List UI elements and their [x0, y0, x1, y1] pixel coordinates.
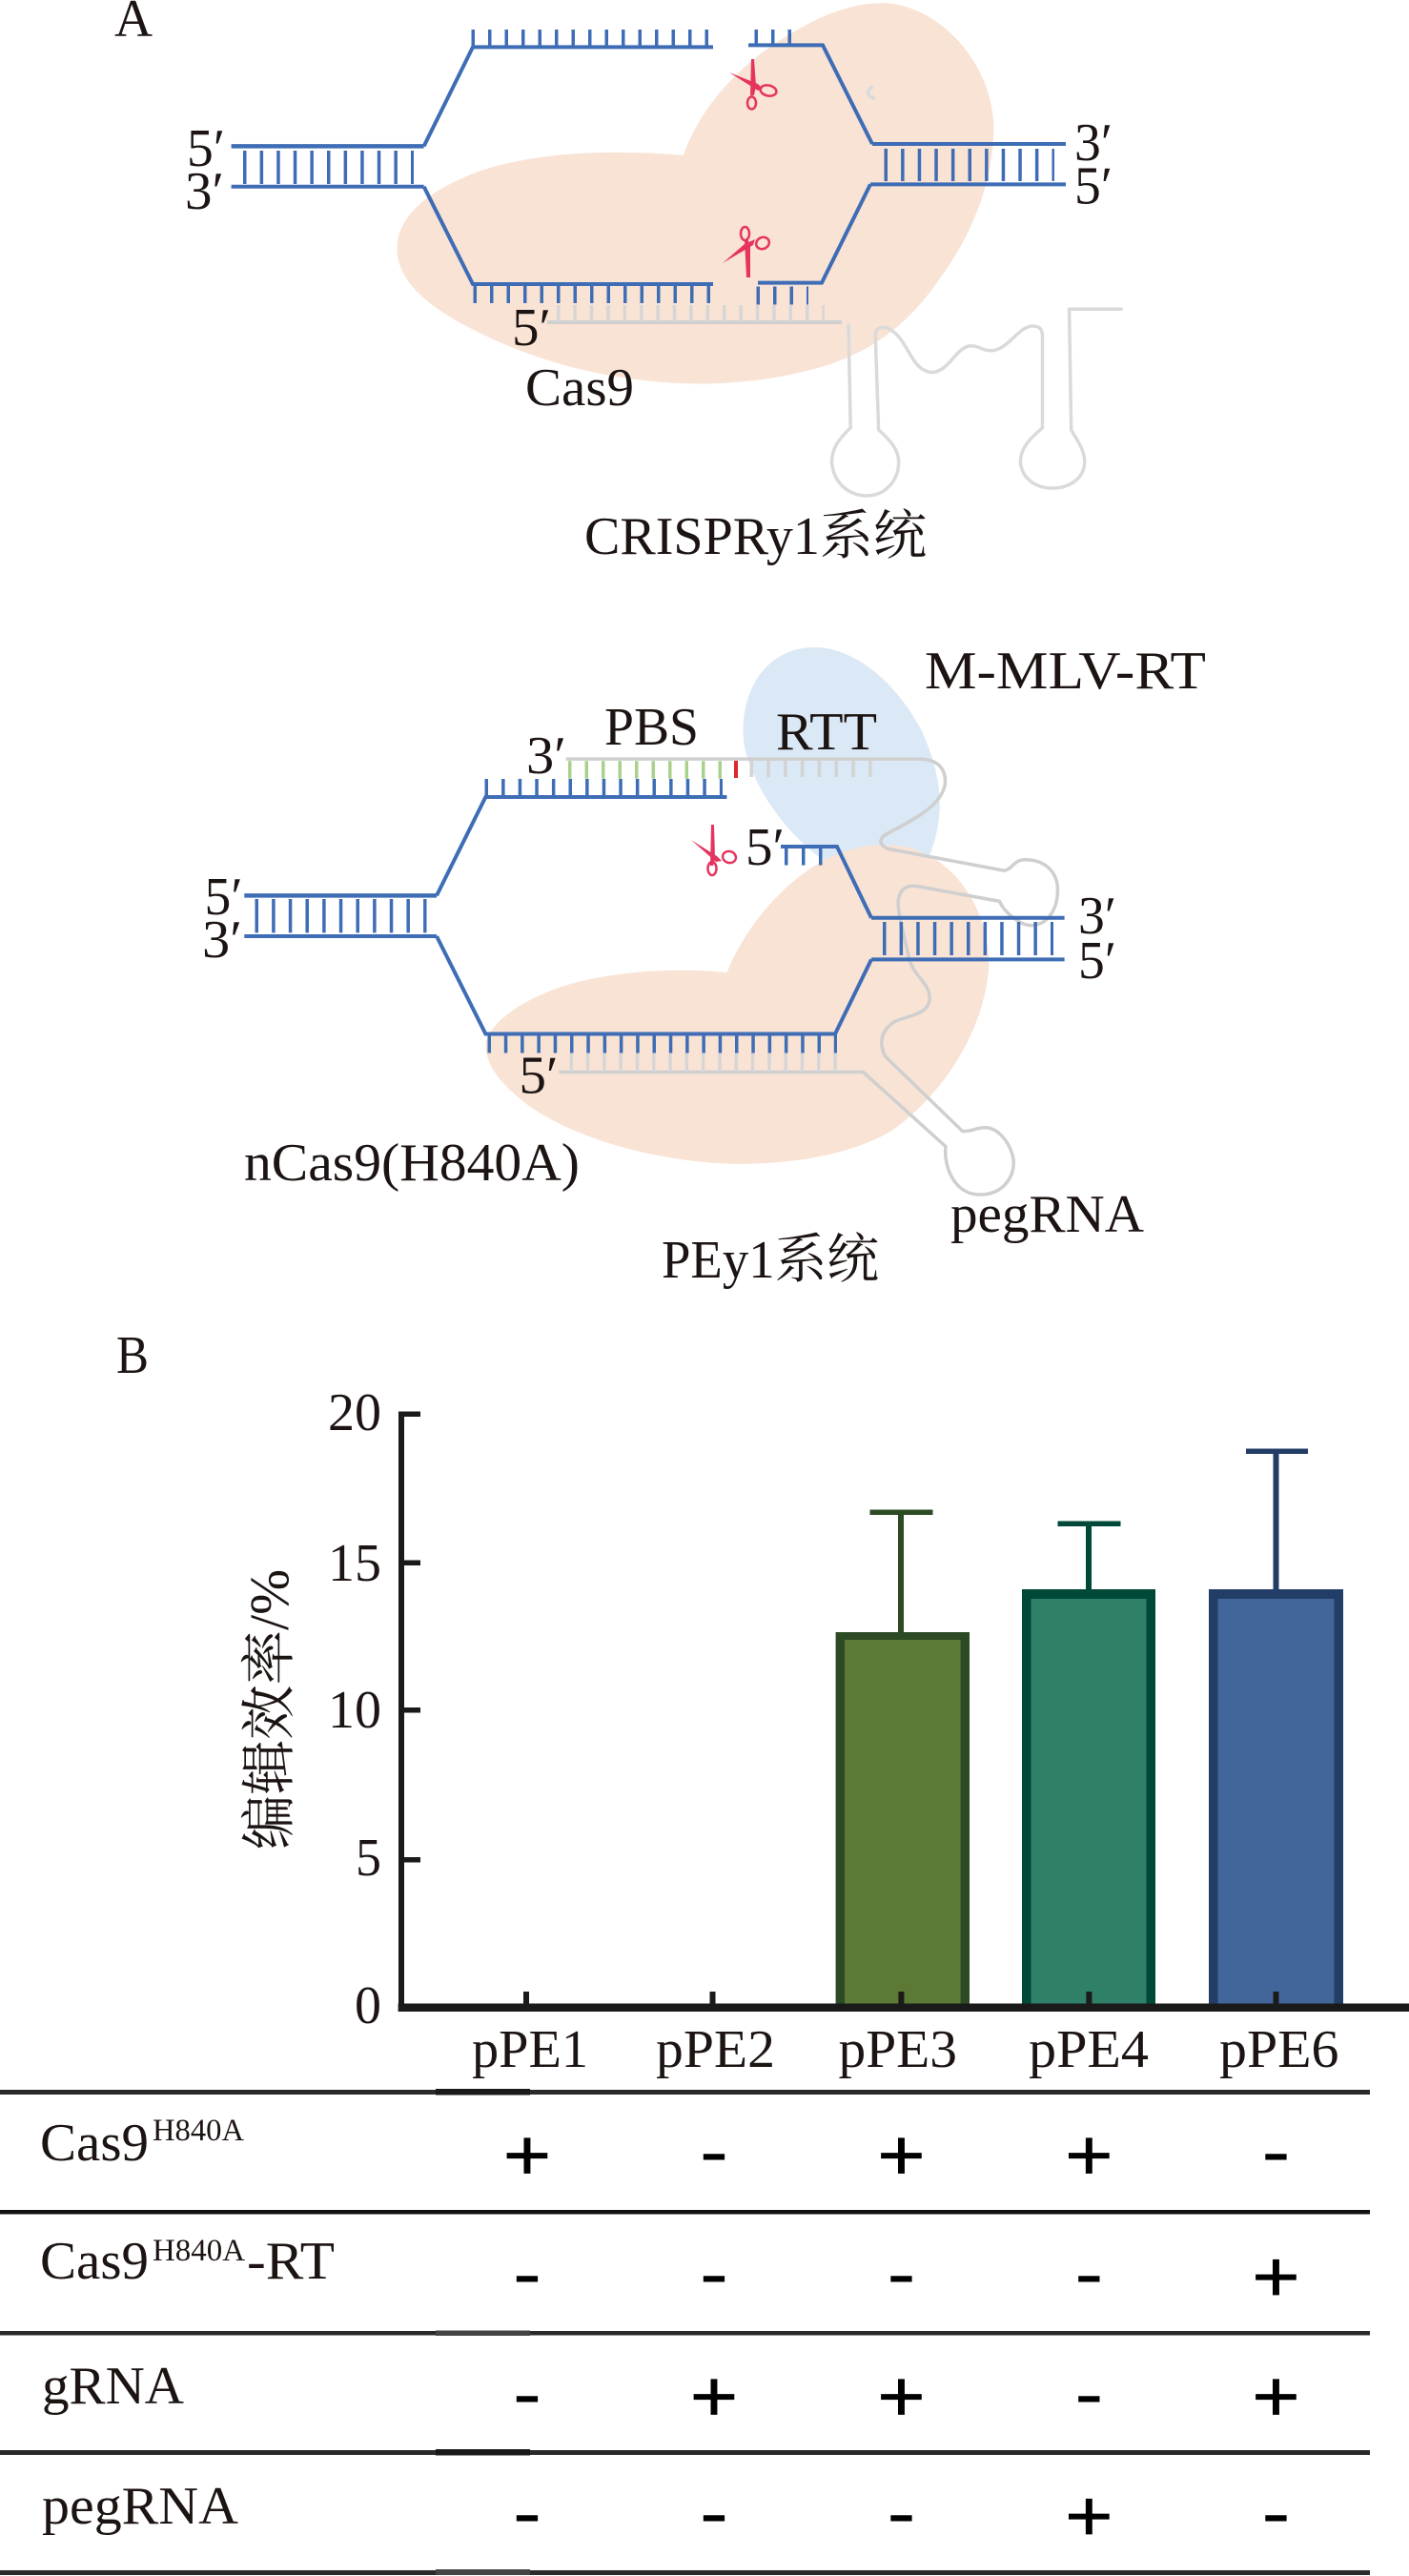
- row: Cas9 H840A: +: [503, 2116, 551, 2196]
- bar: pPE4: [1022, 1522, 1155, 2004]
- RTT grey bases: [749, 761, 872, 777]
- PE system caption: PEy1系统: [662, 1231, 879, 1290]
- row: gRNA: +: [877, 2357, 926, 2437]
- pegRNA label: pegRNA: [950, 1185, 1145, 1244]
- y tick labels: 5: [356, 1829, 381, 1888]
- panel label B: B: [116, 1326, 149, 1385]
- row: pegRNA: +: [1065, 2476, 1113, 2556]
- x axis labels: pPE3: [839, 2020, 957, 2079]
- row: Cas9 H840A-RT: -: [1075, 2248, 1103, 2303]
- 3 prime label: 3′: [526, 726, 566, 786]
- end labels: left: 5′: [204, 868, 242, 927]
- row: Cas9 H840A: -: [1262, 2126, 1290, 2181]
- end labels: right: 3′: [1074, 113, 1113, 173]
- row: Cas9 H840A-RT: -RT: [247, 2232, 335, 2291]
- M-MLV-RT label: M-MLV-RT: [925, 642, 1206, 701]
- pegRNA spacer teeth: [570, 1053, 837, 1072]
- x axis labels: pPE2: [656, 2020, 775, 2079]
- table rules: [0, 2089, 1370, 2575]
- guide 5 prime label: 5′: [512, 298, 551, 358]
- row: Cas9 H840A: [40, 2114, 1290, 2196]
- row: gRNA: +: [1252, 2357, 1300, 2437]
- DNA double strand: left: [244, 895, 437, 936]
- y axis title: 编辑效率/%: [238, 1569, 300, 1850]
- guide RNA scaffold: [832, 87, 1123, 496]
- DNA top strand: [437, 787, 726, 895]
- nCas9 protein blob: [485, 845, 989, 1164]
- DNA double strand: right: [870, 144, 1066, 184]
- DNA top strand with nick: [424, 37, 872, 146]
- Cas9 label: Cas9: [525, 358, 634, 418]
- 5 prime flap label: 5′: [745, 818, 785, 877]
- x axis labels: [472, 2020, 1338, 2079]
- table: construct components: [0, 2089, 1370, 2575]
- end labels: right: 5′: [1074, 156, 1113, 215]
- bar: pPE6: [1209, 1449, 1343, 2004]
- end labels: left: [185, 119, 225, 221]
- row: pegRNA: -: [700, 2487, 728, 2543]
- icon: scissors: [691, 825, 737, 875]
- y tick labels: 20: [328, 1383, 381, 1442]
- row: gRNA: -: [1075, 2368, 1103, 2423]
- end labels: left: [202, 868, 242, 970]
- guide RNA spacer strand: [547, 314, 842, 322]
- row: Cas9 H840A: Cas9: [40, 2114, 149, 2173]
- row: Cas9 H840A: +: [1065, 2116, 1113, 2196]
- nicked 5 prime flap: [781, 847, 871, 918]
- end labels: right: [1078, 887, 1116, 991]
- row: gRNA: +: [690, 2357, 738, 2437]
- row: pegRNA: -: [888, 2487, 915, 2543]
- row: Cas9 H840A-RT: -: [700, 2248, 728, 2303]
- Cas9 protein blob: [398, 3, 993, 384]
- CRISPR system caption: CRISPRy1系统: [584, 507, 927, 566]
- row: Cas9 H840A-RT: H840A: [153, 2234, 245, 2268]
- end labels: left: 5′: [187, 119, 225, 178]
- row: Cas9 H840A-RT: [40, 2232, 1300, 2317]
- RTT label: RTT: [776, 703, 877, 762]
- row: Cas9 H840A-RT: -: [513, 2248, 541, 2303]
- end labels: right: 3′: [1078, 887, 1116, 946]
- end labels: left: 3′: [202, 910, 242, 970]
- pegRNA strand: [559, 759, 1057, 1195]
- y tick labels: 0: [355, 1976, 381, 2035]
- x axis labels: pPE6: [1219, 2020, 1338, 2079]
- row: Cas9 H840A-RT: +: [1252, 2237, 1300, 2317]
- row: Cas9 H840A-RT: Cas9: [40, 2232, 149, 2291]
- x axis labels: pPE1: [472, 2020, 588, 2079]
- bar chart: editing efficiency: [238, 1383, 1409, 2079]
- end labels: left: 3′: [185, 162, 224, 221]
- row: Cas9 H840A: -: [700, 2126, 728, 2181]
- PBS label: PBS: [604, 698, 699, 757]
- panel: prime editor system diagram: [202, 642, 1206, 1290]
- DNA double strand: left: [232, 146, 424, 187]
- row: Cas9 H840A-RT: -: [888, 2248, 915, 2303]
- axes and ticks: [398, 1411, 1409, 2012]
- y tick labels: 15: [328, 1534, 381, 1593]
- DNA bottom strand: [437, 936, 871, 1044]
- row: gRNA: -: [513, 2368, 541, 2423]
- pegRNA 5 prime label: 5′: [519, 1047, 559, 1106]
- panel: CRISPR system diagram: [185, 3, 1123, 566]
- icon: top scissors: [729, 59, 777, 109]
- row: gRNA: gRNA: [42, 2357, 185, 2416]
- M-MLV-RT protein blob: [744, 647, 940, 873]
- edit site red base: [734, 761, 738, 778]
- row: Cas9 H840A: H840A: [153, 2114, 244, 2148]
- end labels: right: [1074, 113, 1113, 215]
- row: pegRNA: pegRNA: [42, 2477, 239, 2536]
- y tick labels: [328, 1383, 381, 2035]
- DNA bottom strand with nick: [424, 184, 870, 296]
- row: pegRNA: [42, 2476, 1290, 2556]
- end labels: right: 5′: [1078, 931, 1116, 991]
- row: pegRNA: -: [513, 2487, 541, 2543]
- bar: pPE3: [836, 1510, 970, 2004]
- x axis labels: pPE4: [1029, 2020, 1149, 2079]
- row: pegRNA: -: [1262, 2487, 1290, 2543]
- icon: bottom scissors: [723, 227, 771, 277]
- PBS green bases: [568, 761, 722, 779]
- row: Cas9 H840A: +: [877, 2116, 926, 2196]
- DNA double strand: right: [871, 918, 1065, 959]
- nCas9 label: nCas9(H840A): [244, 1134, 580, 1193]
- y tick labels: 10: [328, 1681, 381, 1740]
- row: gRNA: [42, 2357, 1300, 2437]
